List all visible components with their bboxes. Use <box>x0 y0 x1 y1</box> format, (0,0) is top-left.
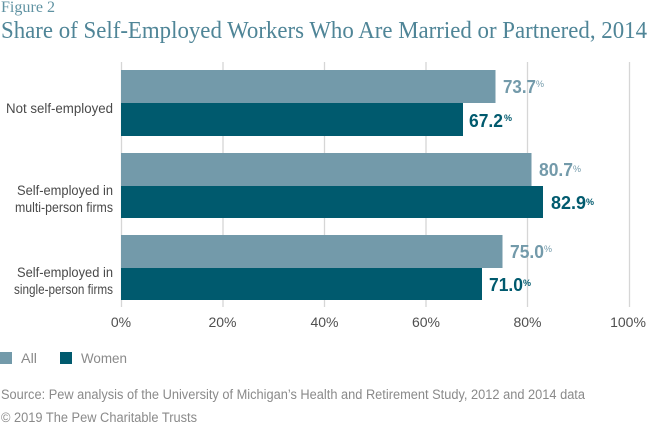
legend: All <box>21 351 37 366</box>
x axis labels: 0% <box>111 314 131 330</box>
value labels: 80.7 <box>539 160 573 180</box>
category labels <box>6 101 113 297</box>
value labels: % <box>586 197 594 207</box>
value labels <box>469 77 594 295</box>
category labels: multi-person firms <box>15 200 113 215</box>
category labels: single-person firms <box>14 282 113 297</box>
x axis labels <box>111 314 646 330</box>
x axis labels: 100% <box>610 314 646 330</box>
value labels: 67.2 <box>469 111 503 131</box>
x axis labels: 80% <box>513 314 542 330</box>
x axis labels: 40% <box>310 314 339 330</box>
legend <box>0 351 127 366</box>
source note: Source: Pew analysis of the University of Michigan’s Health and Retirement Study, 2012 and 2014 data <box>1 387 585 402</box>
x axis labels: 20% <box>208 314 237 330</box>
value labels: 71.0 <box>489 275 523 295</box>
category labels: Self-employed in <box>17 183 113 198</box>
value labels: % <box>544 244 552 254</box>
value labels: % <box>536 79 544 89</box>
x axis labels: 60% <box>412 314 440 330</box>
value labels: 73.7 <box>503 77 536 97</box>
value labels: % <box>523 278 531 288</box>
legend: Women <box>81 351 127 366</box>
value labels: % <box>504 113 512 123</box>
bars: not self-employed <box>121 70 496 136</box>
bar chart <box>121 70 543 300</box>
value labels: 82.9 <box>551 193 586 213</box>
category labels: Self-employed in <box>17 265 113 280</box>
value labels: 75.0 <box>510 242 544 262</box>
category labels: Not self-employed <box>6 101 113 116</box>
bars: single-person firms <box>121 235 502 300</box>
bars: multi-person firms <box>121 153 543 218</box>
value labels: % <box>573 164 581 174</box>
